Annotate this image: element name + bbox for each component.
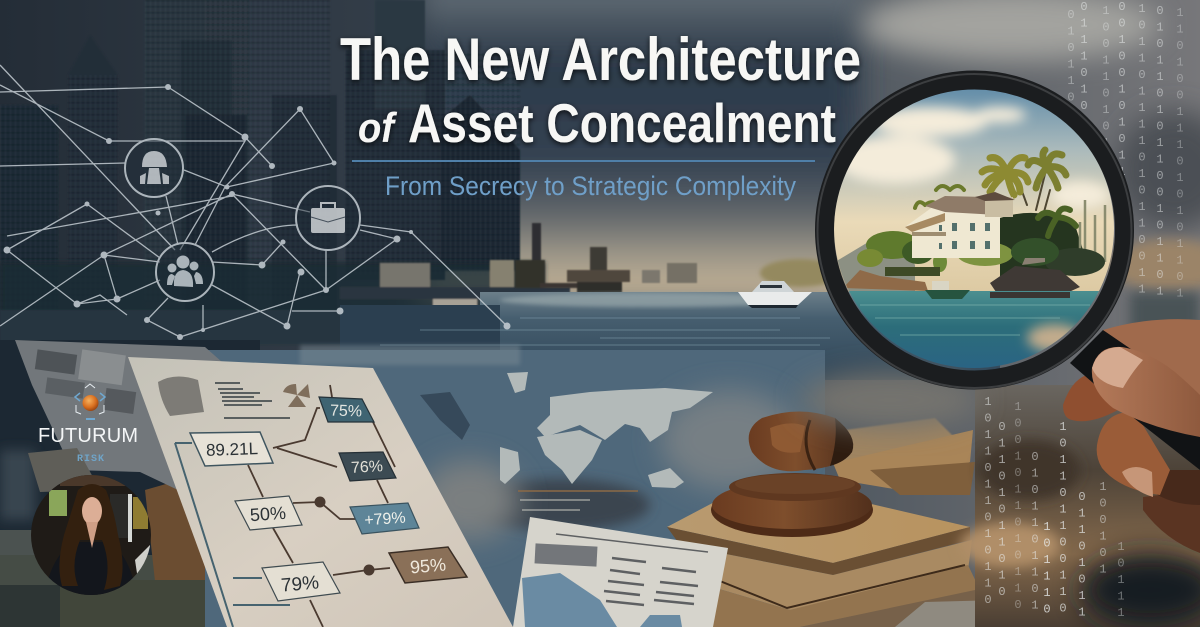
icon: rocket emblem circle	[125, 139, 183, 197]
flow box: 89.21L: 89.21L	[206, 439, 258, 460]
hand: upper finger and thumb	[1092, 319, 1200, 437]
flow box: 75%	[319, 397, 374, 422]
flow box: 50%: 50%	[249, 503, 287, 525]
binary data columns: 01101011010	[995, 420, 1009, 602]
flow box: 75%: 75%	[330, 402, 362, 421]
binary data columns: 101101100110	[1056, 420, 1070, 618]
portrait photo	[31, 475, 151, 595]
flow box: 79%: 79%	[280, 572, 320, 597]
gavel	[711, 412, 873, 537]
rear document	[15, 340, 222, 492]
binary data columns: 1001101011	[1099, 4, 1113, 169]
lens boat	[925, 281, 970, 299]
portrait face	[82, 497, 102, 525]
world map panel	[205, 345, 825, 627]
logo: Futurum Risk	[38, 384, 138, 465]
binary data columns: 0101100010	[1064, 8, 1078, 173]
harbour waterfront	[0, 260, 570, 344]
map continents	[500, 372, 713, 488]
binary data columns: 1001011010110	[1011, 400, 1025, 614]
document bars	[215, 383, 290, 418]
title block	[340, 26, 861, 201]
heading line 2: Asset Concealment	[408, 92, 836, 154]
flow box: +79%	[350, 503, 419, 534]
flow box: 76%	[339, 452, 396, 481]
document header badge	[158, 376, 204, 416]
lens island greenery	[857, 200, 1105, 278]
portrait hair	[59, 484, 123, 590]
portrait shirt	[49, 542, 133, 595]
binary data columns	[981, 0, 1187, 622]
books	[667, 418, 1000, 627]
foreground small document	[513, 517, 728, 627]
icon: people group circle	[156, 243, 214, 301]
logo sub-label: RISK	[77, 454, 104, 465]
binary data columns: 10111	[1114, 540, 1128, 622]
right side tint panel	[800, 292, 1200, 627]
flow box: 89.21L	[190, 432, 273, 466]
lens shore rocks	[846, 258, 1080, 291]
binary data columns: 101110	[1040, 520, 1054, 619]
magnifier handle	[1070, 330, 1200, 470]
binary data columns: 01110101011011	[1077, 0, 1091, 231]
flow box: 50%	[235, 496, 302, 530]
binary data columns: 0101101101	[1028, 450, 1042, 615]
flow box: 79%	[262, 562, 340, 601]
lens water	[849, 291, 1099, 368]
main flowchart document	[128, 357, 513, 627]
title rule	[352, 160, 815, 162]
magnifying glass	[818, 74, 1132, 388]
lens frame	[824, 80, 1124, 380]
yacht	[738, 281, 812, 308]
oil platforms	[515, 223, 697, 300]
heading line 2 prefix: of	[358, 104, 398, 151]
sea	[340, 292, 1000, 380]
subtitle: From Secrecy to Strategic Complexity	[385, 171, 796, 201]
flow box: 76%: 76%	[351, 458, 383, 477]
city skyline	[0, 0, 520, 315]
binary data columns: 00100101011101	[1115, 0, 1129, 231]
flow box: 95%: 95%	[409, 554, 447, 578]
network nodes	[4, 84, 510, 340]
binary data columns: 110100111010101101	[1173, 6, 1187, 303]
logo mark	[75, 384, 105, 419]
lens scene	[830, 85, 1120, 371]
flowchart connectors	[175, 443, 290, 627]
heading line 1: The New Architecture	[340, 26, 861, 93]
flow box: +79%: +79%	[364, 510, 406, 529]
icon: briefcase circle	[296, 186, 360, 250]
network diagram	[0, 65, 510, 340]
lens villa	[905, 192, 1015, 258]
binary data columns: 101101111010110011	[1135, 2, 1149, 299]
lens distant hills	[838, 243, 915, 294]
document pie chart	[283, 384, 310, 407]
lens palm trees	[915, 150, 1076, 236]
flow box: 95%	[389, 547, 467, 583]
lower left dark backdrop	[0, 340, 260, 627]
logo wordmark: FUTURUM	[38, 425, 138, 447]
lens sky	[830, 85, 1120, 295]
binary data columns: 010110101100101101	[1153, 4, 1167, 301]
binary data columns: 01101011	[1075, 490, 1089, 622]
hand: lower fingers	[1063, 374, 1200, 553]
binary data columns: 100101	[1096, 480, 1110, 579]
lens clouds	[835, 107, 1110, 209]
binary data columns: 1011011010110	[981, 395, 995, 610]
